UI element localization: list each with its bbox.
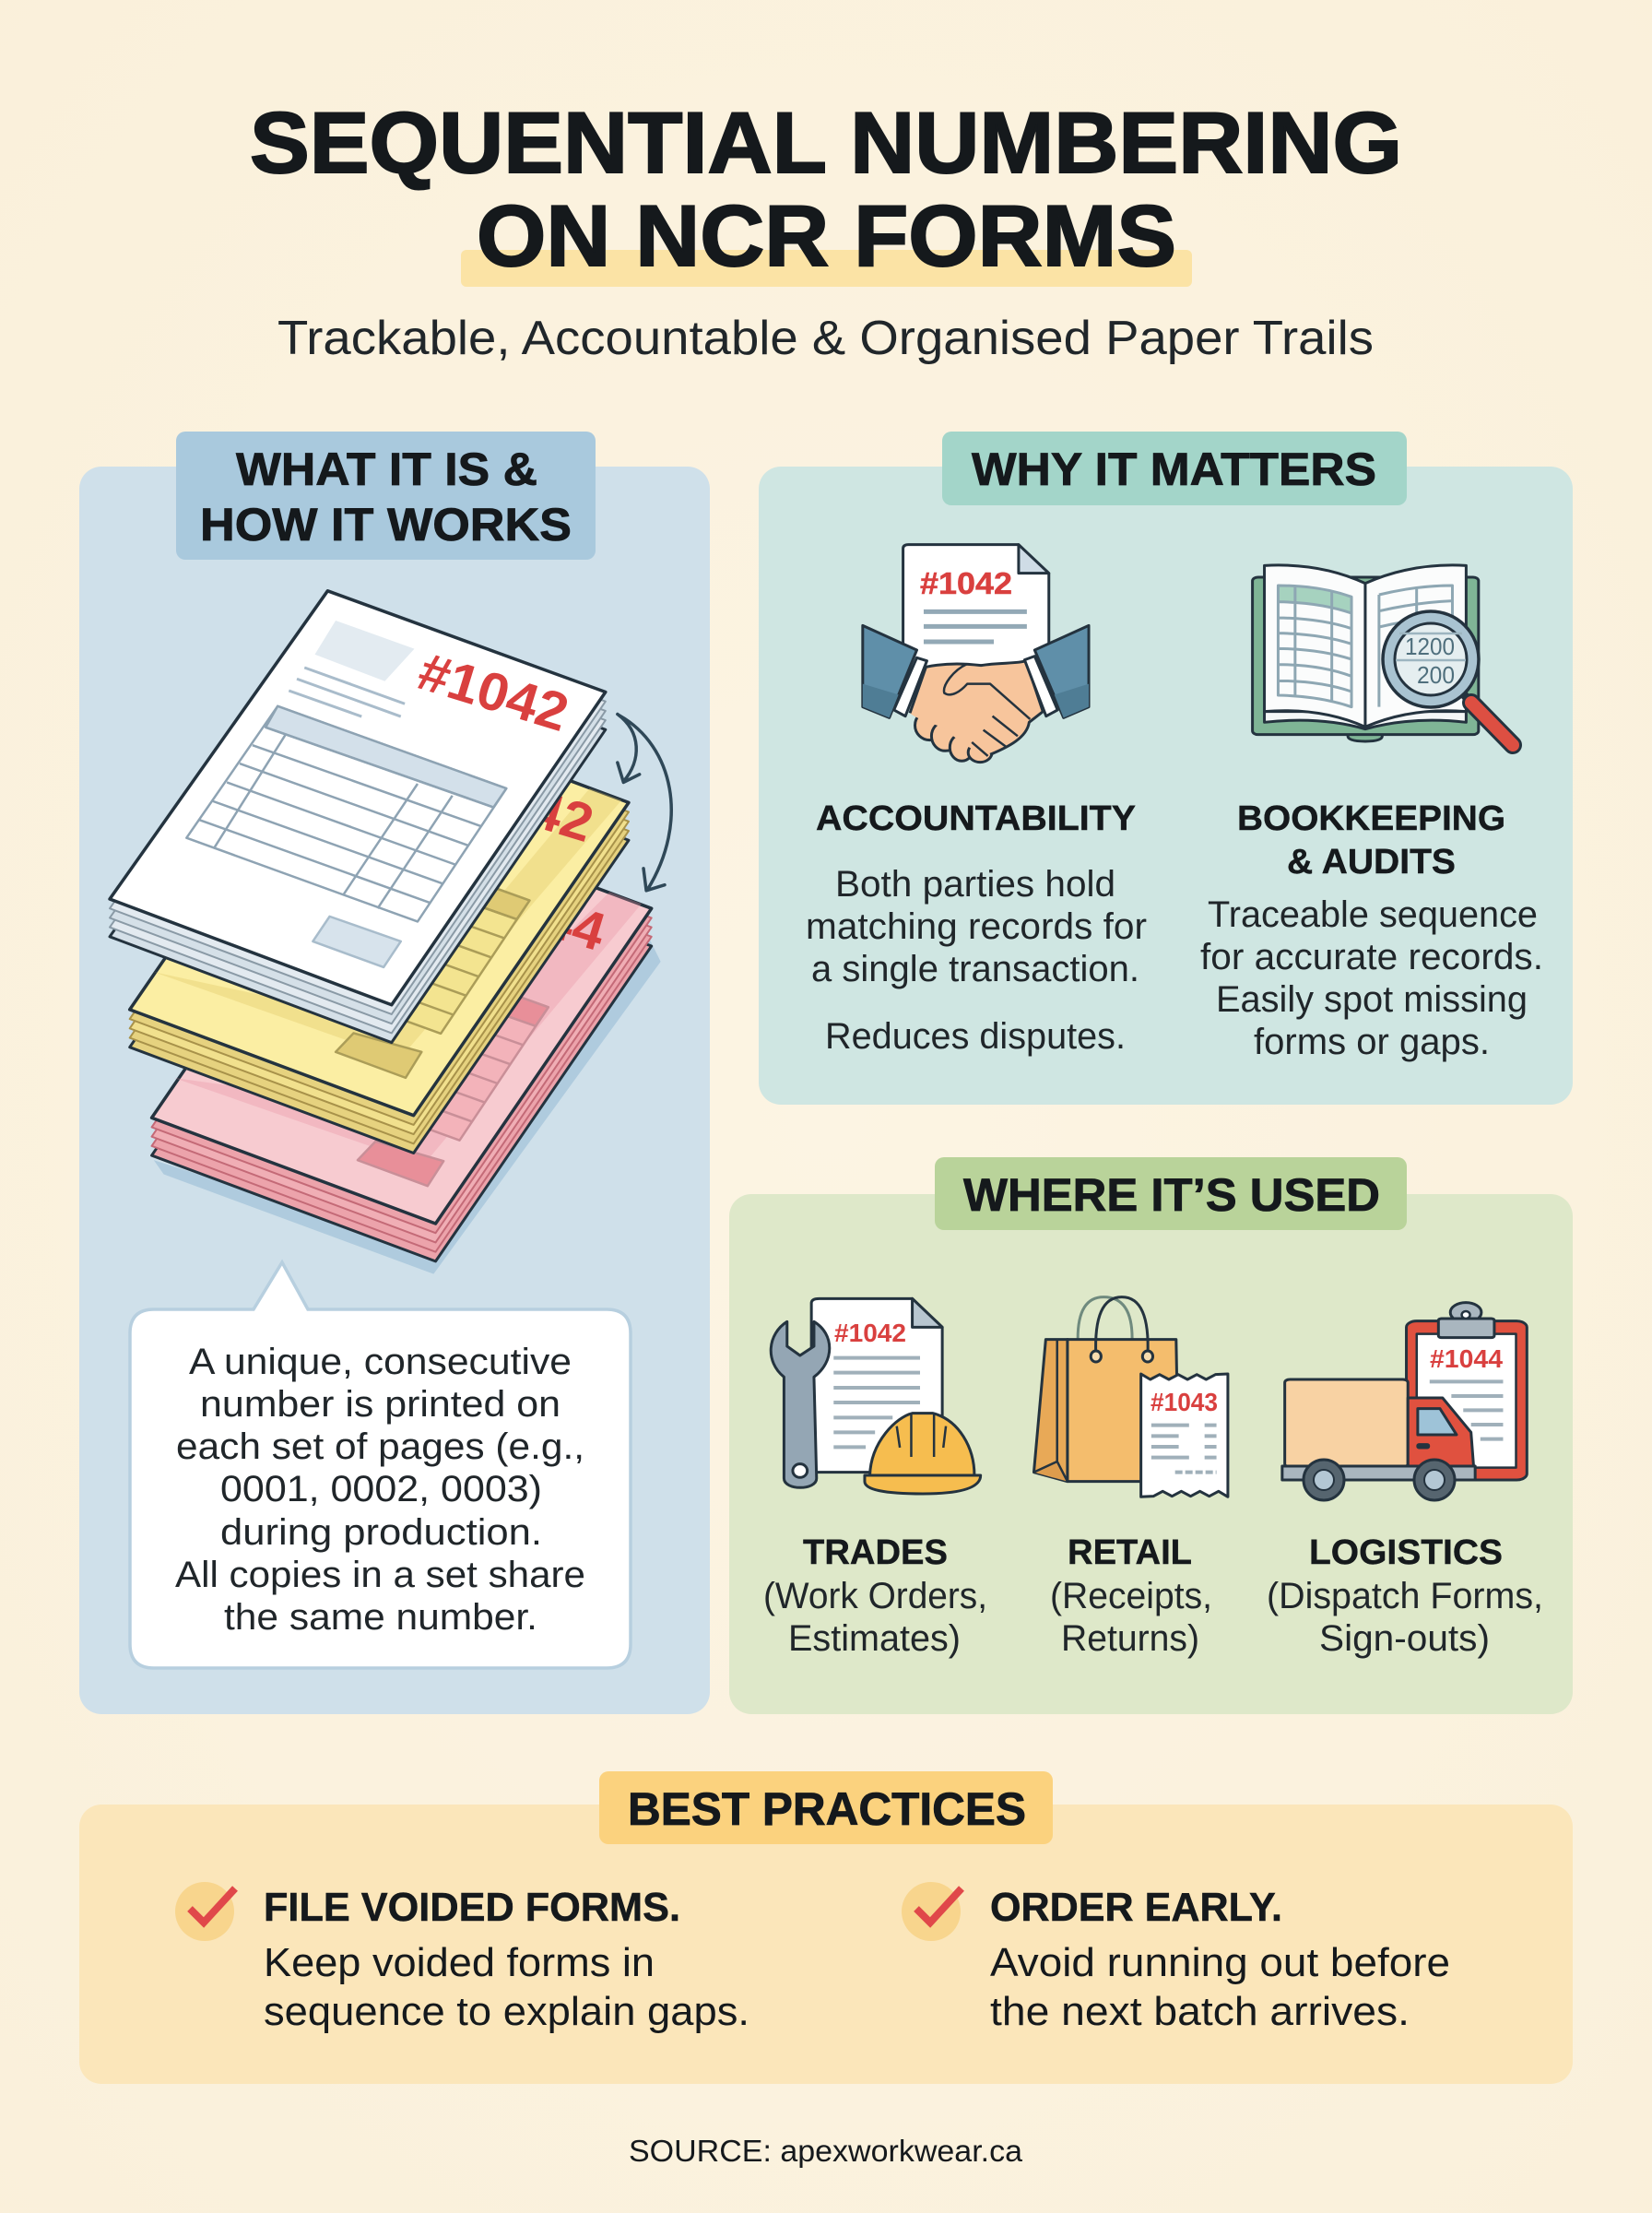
tip: order early: ORDER EARLY. [990, 1885, 1282, 1930]
bookkeeping and audits text: for accurate records. [1200, 937, 1543, 977]
logistics text: (Dispatch Forms, [1267, 1576, 1543, 1616]
tip: file voided forms: sequence to explain gaps. [264, 1989, 749, 2034]
trades text: (Work Orders, [763, 1576, 987, 1616]
illustration: stack of numbered NCR forms [110, 591, 671, 1274]
logistics text [1267, 1533, 1543, 1659]
callout: explanation: 0001, 0002, 0003) [220, 1469, 542, 1509]
tip: file voided forms: FILE VOIDED FORMS. [264, 1885, 680, 1930]
icon: check mark one [175, 1882, 235, 1941]
accountability text: ACCOUNTABILITY [816, 799, 1136, 838]
icon: handshake over numbered document [863, 545, 1089, 763]
callout: explanation: A unique, consecutive [189, 1342, 572, 1382]
icon: wrench, work order and hard hat: #1042 [834, 1319, 906, 1347]
title [250, 94, 1402, 287]
illustration: stack of numbered NCR forms: #1042 [411, 641, 575, 743]
illustration: stack of numbered NCR forms: #1044 [448, 860, 612, 963]
accountability text [806, 799, 1147, 1057]
panel: where it's used [729, 1157, 1573, 1714]
callout: explanation: number is printed on [200, 1384, 560, 1425]
icon: delivery truck and clipboard: #1044 [1430, 1344, 1503, 1373]
trades text: TRADES [803, 1533, 948, 1572]
arrows: sheets connect [618, 714, 671, 891]
callout: explanation: All copies in a set share [175, 1555, 585, 1595]
illustration: stack of numbered NCR forms: #1042 [436, 751, 600, 854]
tip: file voided forms: Keep voided forms in [264, 1940, 655, 1985]
retail text [1050, 1533, 1212, 1659]
bookkeeping and audits text: & AUDITS [1287, 843, 1456, 882]
panel: best practices [79, 1771, 1573, 2084]
trades text: Estimates) [788, 1618, 961, 1659]
heading: where it's used: WHERE IT’S USED [963, 1169, 1380, 1221]
heading: what it is [176, 432, 596, 560]
callout: explanation [130, 1262, 631, 1668]
heading: where it's used [935, 1157, 1407, 1230]
icon: delivery truck and clipboard [1282, 1303, 1527, 1500]
icon: open ledger with magnifier [1253, 565, 1513, 745]
accountability text: Both parties hold [835, 864, 1115, 905]
callout: explanation: each set of pages (e.g., [176, 1426, 584, 1467]
callout: explanation: during production. [220, 1512, 542, 1553]
logistics text: Sign-outs) [1319, 1618, 1490, 1659]
accountability text: Reduces disputes. [825, 1016, 1126, 1057]
panel: what it is and how it works [79, 432, 710, 1714]
trades text [763, 1533, 987, 1659]
callout: explanation: the same number. [224, 1597, 537, 1638]
heading: best practices: BEST PRACTICES [628, 1783, 1026, 1835]
heading: best practices [599, 1771, 1053, 1844]
heading: why it matters [942, 432, 1407, 505]
heading: what it is: WHAT IT IS & [236, 444, 537, 495]
tip: order early: Avoid running out before [990, 1940, 1450, 1985]
icon: wrench, work order and hard hat [771, 1298, 981, 1494]
tip: order early [990, 1885, 1450, 2034]
retail text: RETAIL [1068, 1533, 1192, 1572]
title: SEQUENTIAL NUMBERING [250, 94, 1402, 191]
icon: open ledger with magnifier: 200 [1417, 661, 1455, 689]
accountability text: a single transaction. [811, 949, 1139, 989]
icon: shopping bag and receipt [1033, 1297, 1228, 1497]
bookkeeping and audits text: Easily spot missing [1216, 979, 1528, 1020]
bookkeeping and audits text: forms or gaps. [1254, 1022, 1490, 1062]
subtitle: Trackable, Accountable & Organised Paper Trails [277, 312, 1374, 365]
logistics text: LOGISTICS [1309, 1533, 1503, 1572]
bookkeeping and audits text: BOOKKEEPING [1237, 799, 1505, 838]
source line: SOURCE: apexworkwear.ca [629, 2134, 1023, 2168]
title: ON NCR FORMS [477, 187, 1176, 284]
tip: file voided forms [264, 1885, 749, 2034]
bookkeeping and audits text: Traceable sequence [1208, 894, 1538, 935]
heading: what it is: HOW IT WORKS [200, 499, 572, 550]
panel: why it matters [759, 432, 1573, 1105]
icon: handshake over numbered document: #1042 [920, 566, 1012, 600]
tip: order early: the next batch arrives. [990, 1989, 1410, 2034]
retail text: Returns) [1061, 1618, 1199, 1659]
icon: check mark two [902, 1882, 962, 1941]
accountability text: matching records for [806, 906, 1147, 947]
heading: why it matters: WHY IT MATTERS [972, 444, 1376, 495]
icon: shopping bag and receipt: #1043 [1150, 1388, 1218, 1416]
retail text: (Receipts, [1050, 1576, 1212, 1616]
bookkeeping and audits text [1200, 799, 1543, 1062]
icon: open ledger with magnifier: 1200 [1405, 633, 1455, 660]
